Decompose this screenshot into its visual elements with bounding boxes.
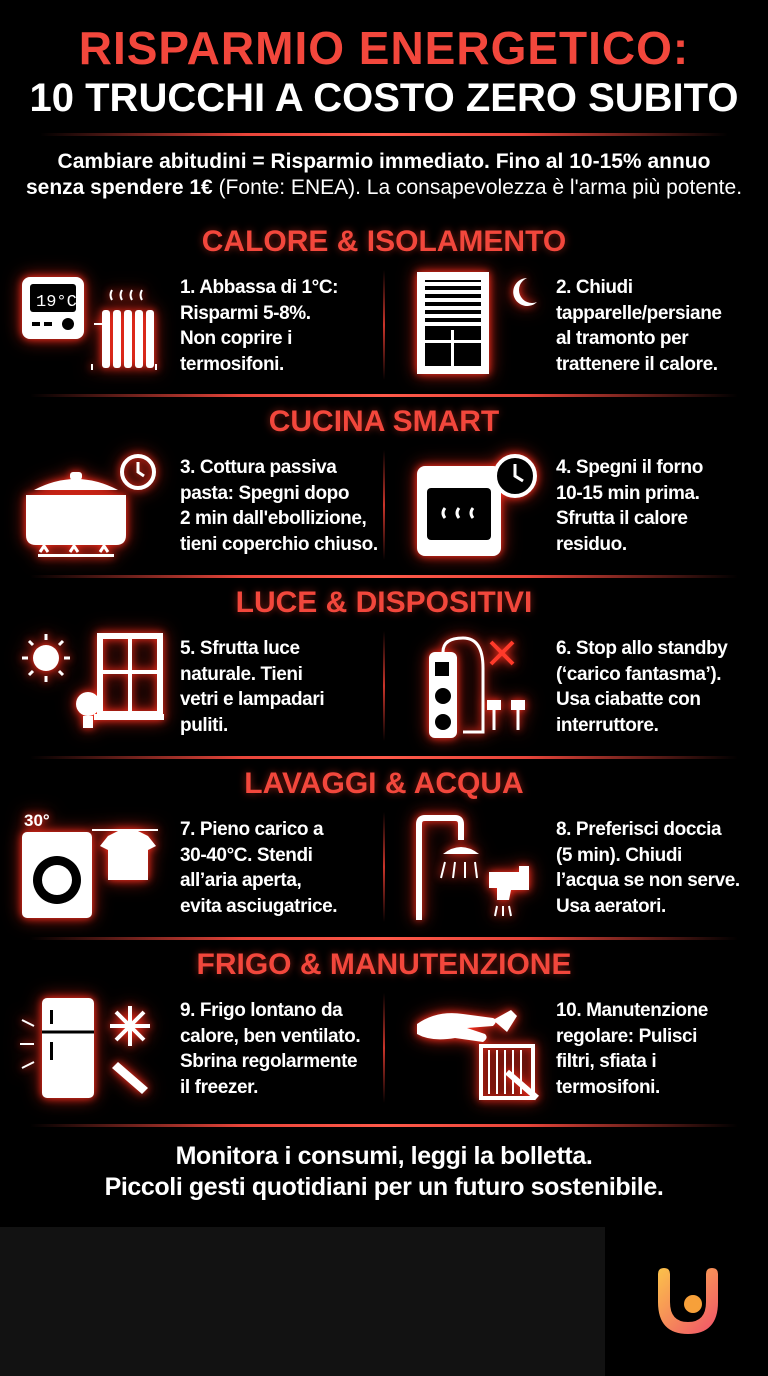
text: tip 6: 6. Stop allo standby [556,638,727,659]
text: tip 7: 30-40°C. Stendi [180,844,313,866]
text: tip 4 [556,457,703,554]
text: tip 1 [180,277,338,374]
text: tip 2 [556,277,722,374]
text: tip 5: vetri e lampadari [180,689,324,710]
text: tip 8 [556,819,740,916]
title: 10 TRUCCHI A COSTO ZERO SUBITO [30,76,738,120]
icon: thermostat radiator [8,263,168,381]
subtitle: Cambiare abitudini = Risparmio immediato. Fino al 10-15% annuo [58,150,710,173]
text: tip 2: trattenere il calore. [556,354,718,374]
text: tip 8: Usa aeratori. [556,896,666,916]
heading: luce: LUCE & DISPOSITIVI [236,586,532,619]
text: tip 2: tapparelle/persiane [556,302,722,324]
text: tip 4: 4. Spegni il forno [556,457,703,478]
text: tip 10: 10. Manutenzione [556,1000,708,1021]
text: tip 6: (‘carico fantasma’). [556,664,721,684]
title: RISPARMIO ENERGETICO: [79,22,689,74]
heading: calore: CALORE & ISOLAMENTO [202,225,566,258]
subtitle: senza spendere 1€ (Fonte: ENEA). La consapevolezza è l'arma più potente. [26,176,742,199]
text: tip 5 [180,638,324,736]
text: tip 3: tieni coperchio chiuso. [180,534,378,554]
text: tip 7: all’aria aperta, [180,870,301,891]
icon: shower tap [402,801,542,930]
text: tip 9: 9. Frigo lontano da [180,1000,342,1021]
text: tip 2: 2. Chiudi [556,277,633,298]
icon: sun window bulb [15,619,177,740]
text: tip 5: 5. Sfrutta luce [180,638,300,659]
icon: hand key filter [405,1000,550,1114]
text: tip 1: Risparmi 5-8%. [180,302,311,324]
icon: washing machine shirt [8,803,166,932]
text: tip 5: naturale. Tieni [180,664,302,684]
icon: oven clock [403,441,550,570]
icon: logo [658,1268,718,1334]
text: tip 9: calore, ben ventilato. [180,1026,360,1046]
icon: power strip plugs [415,624,536,752]
text: tip 3: 2 min dall'ebollizione, [180,508,366,529]
text: tip 1: Non coprire i [180,328,292,349]
text: tip 6 [556,638,728,736]
subtitle [26,150,742,199]
text: tip 10: termosifoni. [556,1076,660,1098]
text: tip 9: il freezer. [180,1076,258,1098]
text: tip 8: 8. Preferisci doccia [556,819,721,840]
text: tip 7 [180,819,337,916]
text: tip 3: 3. Cottura passiva [180,457,336,478]
text: tip 8: (5 min). Chiudi [556,844,682,866]
footer text: Piccoli gesti quotidiani per un futuro sostenibile. [105,1173,663,1201]
icon: shutter moon [403,258,542,388]
heading: lavaggi: LAVAGGI & ACQUA [244,767,524,800]
footer panel [0,1227,605,1376]
heading: cucina: CUCINA SMART [269,405,499,438]
text: tip 10: filtri, sfiata i [556,1051,656,1072]
icon: thermostat radiator: 19°C [36,293,77,312]
icon: washing machine shirt: 30° [24,811,50,830]
footer text [105,1142,663,1201]
text: tip 7: 7. Pieno carico a [180,819,323,840]
text: tip 4: Sfrutta il calore [556,508,688,529]
text: tip 3: pasta: Spegni dopo [180,482,349,504]
text: tip 8: l’acqua se non serve. [556,870,740,891]
icon: fridge snowflake [14,984,159,1112]
heading: frigo: FRIGO & MANUTENZIONE [196,948,572,981]
text: tip 6: interruttore. [556,714,658,736]
text: tip 9: Sbrina regolarmente [180,1051,357,1072]
text: tip 2: al tramonto per [556,328,688,349]
text: tip 10: regolare: Pulisci [556,1026,697,1046]
footer text: Monitora i consumi, leggi la bolletta. [176,1142,592,1170]
text: tip 6: Usa ciabatte con [556,689,701,710]
text: tip 10 [556,1000,708,1098]
text: tip 4: residuo. [556,534,627,554]
text: tip 3 [180,457,378,554]
text: tip 7: evita asciugatrice. [180,896,337,916]
icon: pot timer [12,442,168,570]
title [30,22,738,120]
text: tip 1: termosifoni. [180,354,284,374]
text: tip 5: puliti. [180,714,228,736]
text: tip 1: 1. Abbassa di 1°C: [180,277,338,298]
text: tip 4: 10-15 min prima. [556,482,700,504]
text: tip 9 [180,1000,360,1098]
